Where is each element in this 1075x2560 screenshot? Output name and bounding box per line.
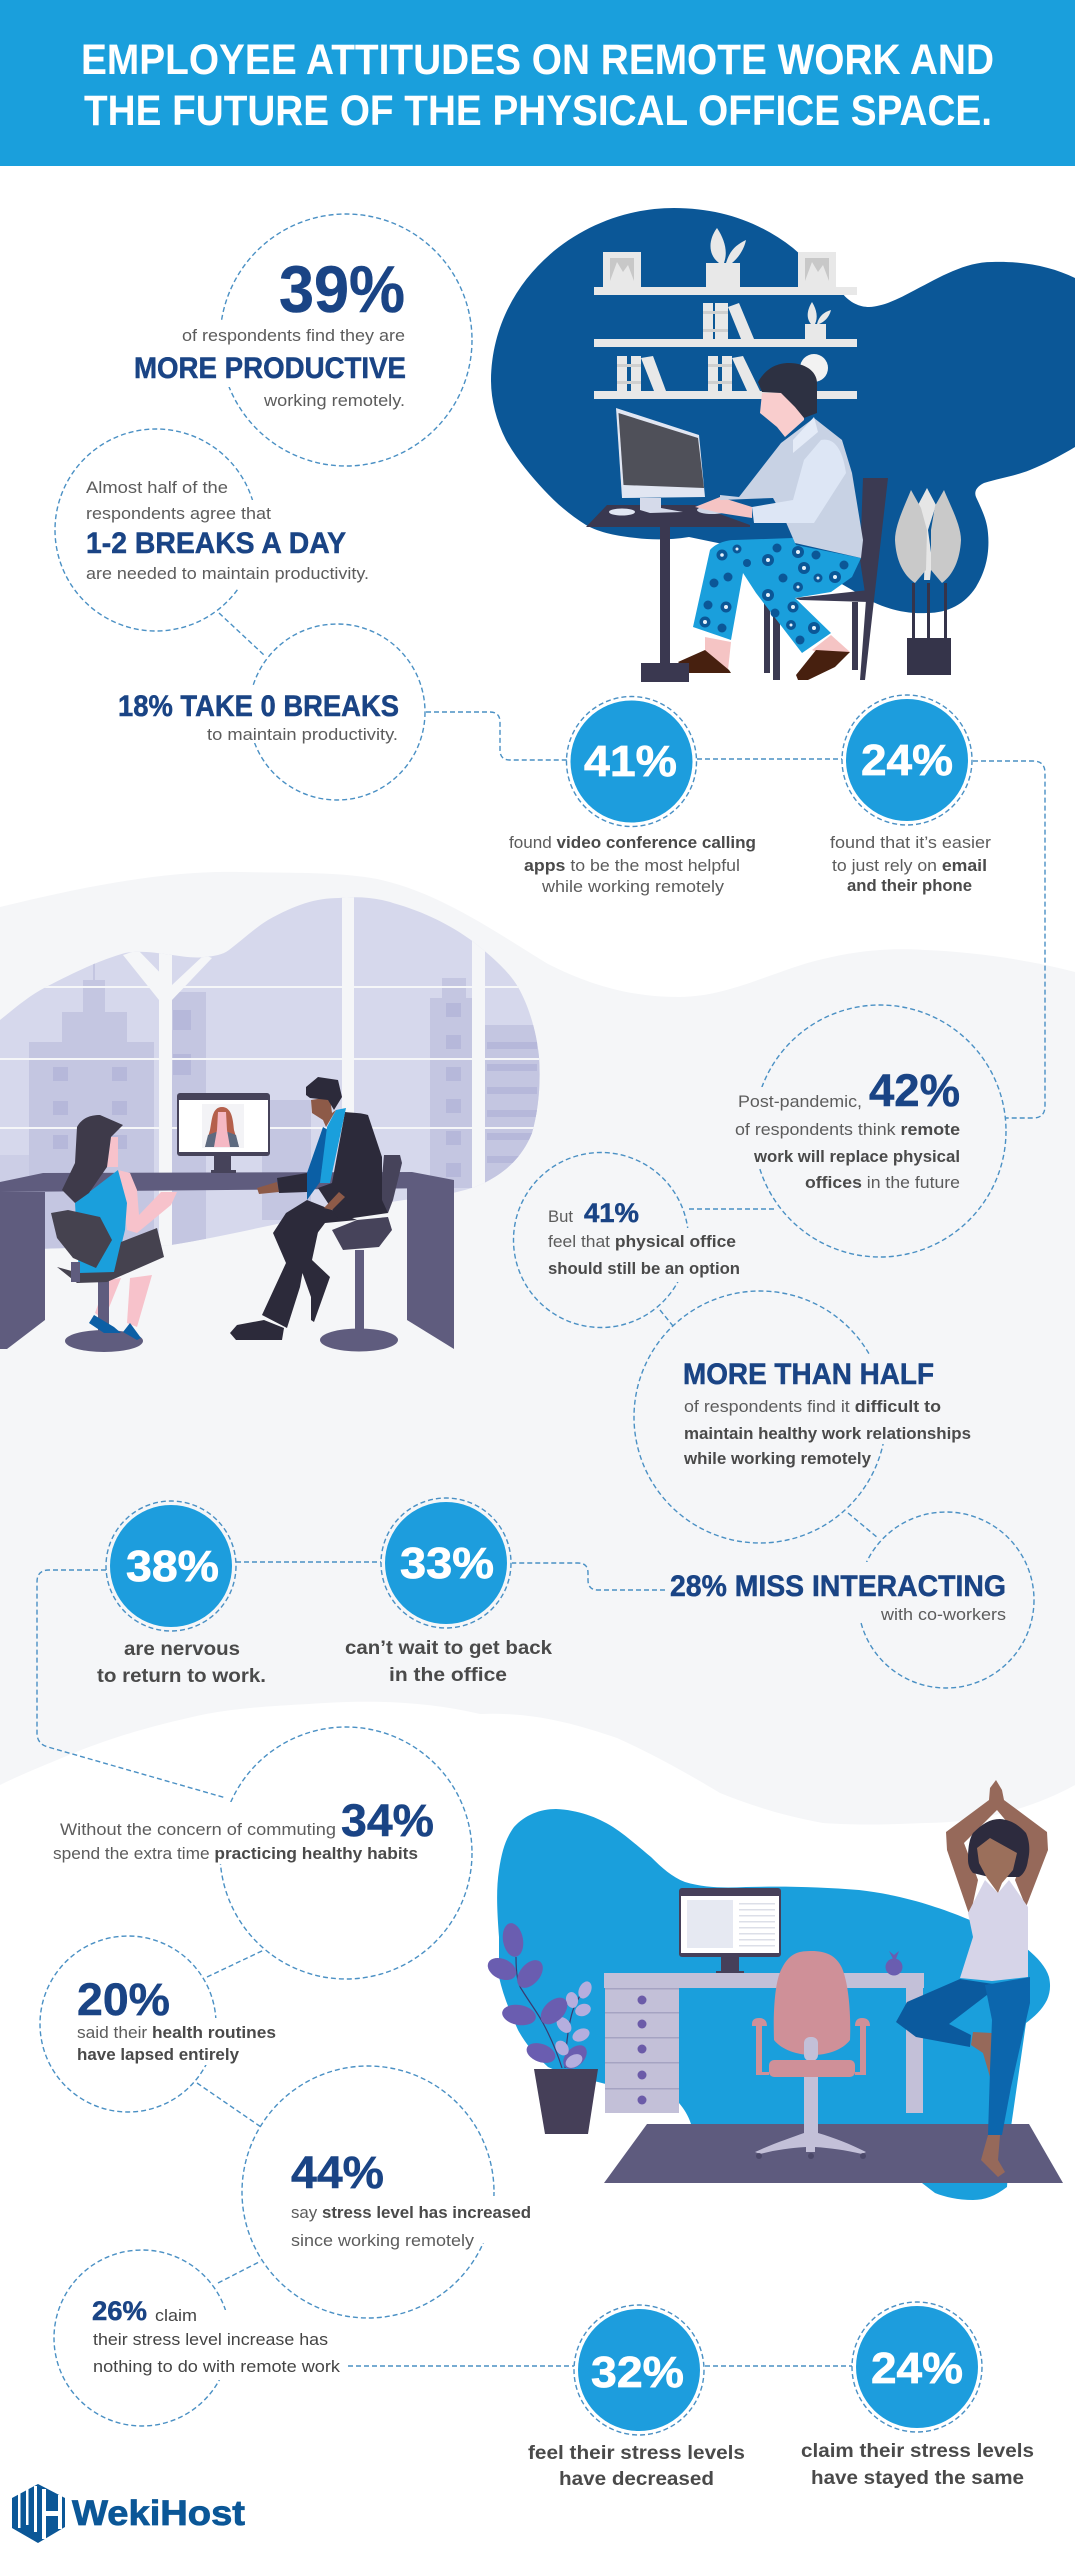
stat: 28% miss interacting [670, 1512, 1034, 1688]
stat: 34% healthy habits: 34% [341, 1795, 434, 1846]
connector: 24% to 42% [973, 761, 1045, 1118]
navy blob [491, 208, 1075, 613]
rug [604, 2124, 1063, 2183]
stat: 26% unrelated stress: 26% [92, 2296, 147, 2326]
caption: 32% [528, 2443, 745, 2490]
stat: 1-2 breaks a day [55, 429, 375, 631]
badge: 33% [381, 1498, 511, 1628]
badge: 32%: 32% [591, 2348, 684, 2397]
caption: 41% [509, 833, 756, 896]
badge: 24%: 24% [861, 736, 953, 785]
stat: 34% healthy habits [53, 1727, 472, 1979]
connector: 41% to more than half [660, 1310, 673, 1326]
caption: 24%: found that it’s easier [830, 833, 991, 852]
title: EMPLOYEE ATTITUDES ON REMOTE WORK AND [81, 36, 994, 84]
connector: 44% to 26% [218, 2261, 261, 2283]
stat: but 41% physical office: 41% [584, 1198, 639, 1228]
stat: more than half [634, 1291, 971, 1543]
stat: 44% stress increased [242, 2066, 531, 2318]
connector: half to 28% [848, 1513, 878, 1538]
stat: 18% take 0 breaks [118, 624, 425, 800]
stat: more than half: maintain healthy work relationships [684, 1424, 971, 1443]
ankles and slippers [678, 635, 850, 680]
stat: more than half: while working remotely [683, 1449, 872, 1468]
window blob with city [0, 890, 560, 1252]
illustration: man at desk with bookshelves [491, 208, 1075, 682]
caption: 24% stayed the same [801, 2441, 1034, 2489]
stat: 42% post-pandemic [730, 1005, 1006, 1257]
connector: 41% to 42% [689, 1208, 775, 1210]
stat: 39% productive: MORE PRODUCTIVE [134, 352, 406, 385]
stat: but 41% physical office: But [548, 1207, 573, 1226]
man on stool [230, 1077, 402, 1352]
illustration: yoga at home office [484, 1780, 1063, 2200]
caption: 32%: have decreased [559, 2469, 714, 2490]
stat: 39% productive: 39% [279, 252, 405, 326]
stat: 1-2 breaks a day: Almost half of the [86, 478, 228, 497]
caption: 38% [97, 1639, 266, 1687]
stat: 1-2 breaks a day: are needed to maintain productivity. [86, 564, 369, 583]
stat: 42% post-pandemic: work will replace physical [753, 1147, 960, 1166]
stat: 28% miss interacting: with co-workers [880, 1605, 1006, 1624]
stat: 26% unrelated stress [54, 2250, 341, 2426]
stat: 44% stress increased: say stress level has increased [291, 2203, 531, 2222]
stat: 26% unrelated stress: claim [155, 2306, 197, 2325]
woman in tree pose [896, 1780, 1048, 2177]
stat: more than half: MORE THAN HALF [683, 1358, 934, 1391]
badge: 32% [574, 2305, 704, 2435]
background wave: grey section [0, 872, 1075, 1824]
caption: 33%: can’t wait to get back [345, 1638, 552, 1659]
stat: 20% lapsed routines: 20% [77, 1974, 170, 2025]
connector: 33% to 38% [236, 1561, 381, 1563]
caption: 24% [830, 833, 991, 895]
badge: 24% stayed the same: 24% [871, 2344, 963, 2393]
stat: 18% take 0 breaks: 18% TAKE 0 BREAKS [118, 690, 399, 723]
stat: 20% lapsed routines [40, 1936, 276, 2112]
caption: 33%: in the office [389, 1665, 507, 1686]
stat: 44% stress increased: since working remotely [291, 2231, 475, 2250]
stat: more than half: of respondents find it difficult to [684, 1397, 941, 1416]
computer monitor [609, 408, 727, 516]
connector: 34% to 20% [207, 1950, 264, 1977]
badge: 24% stayed the same [852, 2302, 982, 2432]
head [758, 363, 817, 437]
title: THE FUTURE OF THE PHYSICAL OFFICE SPACE. [84, 87, 992, 135]
desk foot [641, 663, 689, 682]
logo: WekiHost [12, 2484, 245, 2543]
header band [0, 0, 1075, 166]
stat: 44% stress increased: 44% [291, 2147, 384, 2198]
badge: 38% [106, 1501, 236, 1631]
title [81, 36, 994, 135]
stat: 26% unrelated stress: nothing to do with remote work [93, 2357, 341, 2376]
stat: 1-2 breaks a day: respondents agree that [86, 504, 271, 523]
stat: 42% post-pandemic: of respondents think remote [735, 1120, 960, 1139]
bookshelves [594, 228, 857, 399]
stat: 42% post-pandemic: offices in the future [805, 1173, 960, 1192]
caption: 38%: are nervous [124, 1639, 240, 1660]
caption: 41%: while working remotely [541, 877, 725, 896]
stat: 1-2 breaks a day: 1-2 BREAKS A DAY [86, 527, 346, 560]
stat: 20% lapsed routines: said their health routines [77, 2023, 276, 2042]
logo icon [12, 2484, 65, 2543]
connector: to 41% [426, 712, 567, 760]
stat: 28% miss interacting: 28% MISS INTERACTING [670, 1570, 1006, 1603]
stat: 42% post-pandemic: 42% [869, 1065, 960, 1116]
monitor [679, 1888, 781, 1973]
connector: 28% to 33% [512, 1563, 665, 1590]
connector: 41% to 24% [697, 758, 842, 760]
stat: but 41% physical office: should still be an option [548, 1259, 740, 1278]
connector: breaks [219, 613, 264, 655]
caption: 33% [345, 1638, 552, 1686]
caption: 41%: found video conference calling [509, 833, 756, 852]
stat: 39% productive: of respondents find they are [182, 326, 405, 345]
video call monitor [177, 1093, 270, 1173]
connector: 32% to 24% [705, 2365, 852, 2367]
blue blob [497, 1809, 1050, 2200]
badge: 38%: 38% [126, 1542, 219, 1591]
patterned pyjama trousers [693, 538, 861, 653]
stat: 18% take 0 breaks: to maintain productivity. [207, 725, 398, 744]
caption: 41%: apps to be the most helpful [524, 856, 740, 875]
logo: WekiHost: WekiHost [72, 2494, 245, 2533]
caption: 24% stayed the same: have stayed the same [811, 2468, 1024, 2489]
caption: 24%: to just rely on email [832, 856, 987, 875]
woman on chair [51, 1115, 177, 1352]
desk [0, 1172, 454, 1349]
stat: 39% productive: working remotely. [263, 391, 405, 410]
badge: 33%: 33% [400, 1539, 494, 1588]
stat: 26% unrelated stress: their stress level increase has [93, 2330, 328, 2349]
connector: 20% to 44% [197, 2083, 261, 2127]
connector: 26% to 32% [348, 2365, 574, 2367]
potted plant [484, 1922, 598, 2134]
caption: 32%: feel their stress levels [528, 2443, 745, 2464]
stat: but 41% physical office [514, 1152, 740, 1328]
hands [695, 497, 752, 518]
connector: 38% to 34% [37, 1570, 226, 1798]
stat: 42% post-pandemic: Post-pandemic, [738, 1092, 862, 1111]
badge: 41% [566, 696, 696, 826]
office plant [895, 488, 961, 675]
office chair [752, 1951, 870, 2159]
caption: 24% stayed the same: claim their stress levels [801, 2441, 1034, 2462]
desk [586, 505, 750, 667]
chair [764, 478, 888, 680]
apple [886, 1951, 902, 1976]
caption: 38%: to return to work. [97, 1666, 266, 1687]
stat: 39% productive [134, 214, 472, 466]
shirt [720, 417, 863, 558]
caption: 24%: and their phone [847, 876, 972, 895]
stat: but 41% physical office: feel that physical office [548, 1232, 736, 1251]
stat: 34% healthy habits: Without the concern of commuting [60, 1820, 336, 1839]
stat: 20% lapsed routines: have lapsed entirely [77, 2045, 240, 2064]
stat: 34% healthy habits: spend the extra time practicing healthy habits [53, 1844, 418, 1863]
illustration: video meeting at desk [0, 890, 560, 1352]
badge: 24% [842, 695, 972, 825]
badge: 41%: 41% [584, 737, 677, 786]
desk and drawers [604, 1973, 924, 2113]
